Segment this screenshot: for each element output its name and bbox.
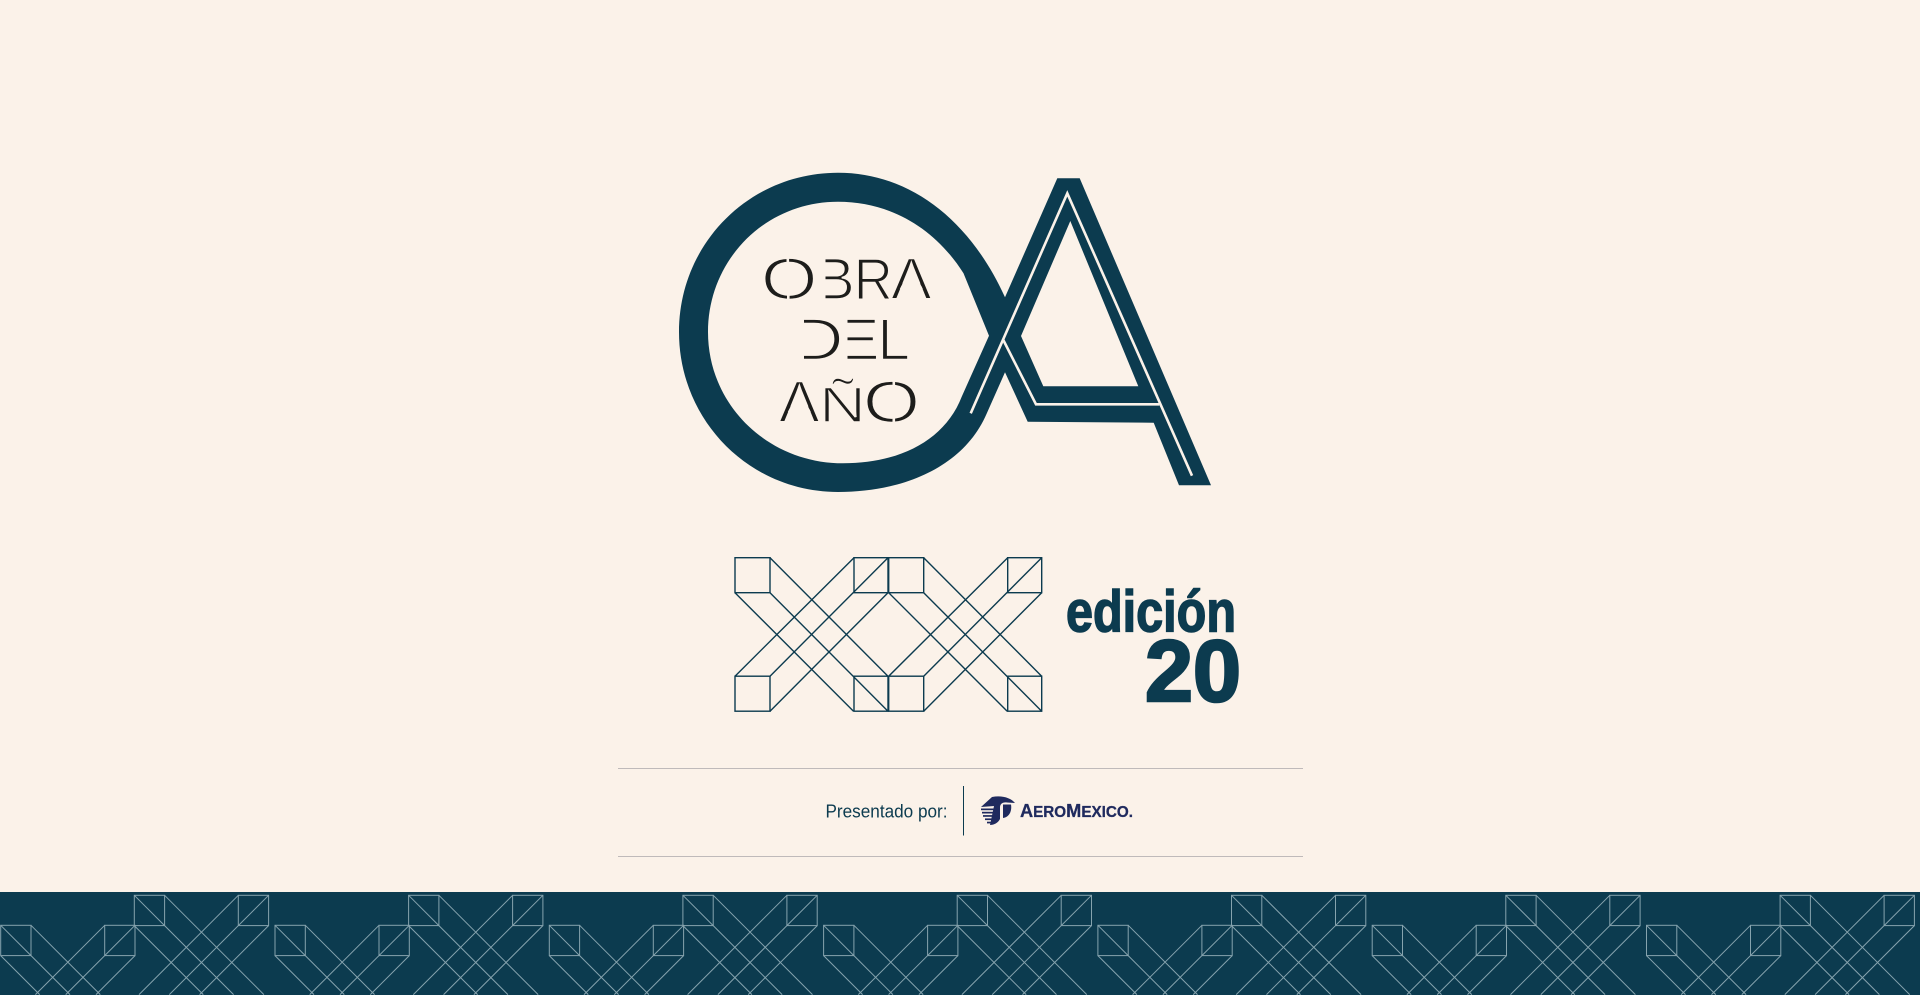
footer band with geometric pattern <box>0 892 1920 995</box>
sponsor strip <box>618 768 1303 856</box>
stencil cuts over the wordmark letters <box>786 255 923 425</box>
wordmark: OBRA DEL AÑO: O <box>761 247 817 312</box>
text: Aeromexico wordmark: AEROMEXICO. <box>1020 800 1133 821</box>
wordmark: OBRA DEL AÑO: Ñ <box>819 377 866 433</box>
letter O and A monogram shape <box>679 173 1211 492</box>
wordmark: OBRA DEL AÑO <box>761 247 932 435</box>
wordmark: OBRA DEL AÑO: E <box>837 308 880 372</box>
logo: Obra del Año monogram <box>679 173 1211 492</box>
wordmark: OBRA DEL AÑO: R <box>854 247 893 312</box>
inner cream lines of the A <box>971 193 1192 476</box>
wordmark: OBRA DEL AÑO: A <box>891 247 932 312</box>
heading: edición 20: edición <box>1066 580 1236 644</box>
wordmark: OBRA DEL AÑO: L <box>878 308 910 372</box>
wordmark: OBRA DEL AÑO: D <box>792 308 844 372</box>
heading: edición 20 <box>1066 580 1241 720</box>
heading: edición 20: 20 <box>1145 623 1241 720</box>
icon: Aeromexico eagle <box>981 796 1015 825</box>
text: Presentado por: Presentado por: <box>826 802 948 822</box>
wordmark: OBRA DEL AÑO: O <box>863 370 920 435</box>
logo: XX roman numeral outline <box>735 558 1042 711</box>
wordmark: OBRA DEL AÑO: B <box>816 247 855 312</box>
wordmark: OBRA DEL AÑO: A <box>779 370 820 435</box>
